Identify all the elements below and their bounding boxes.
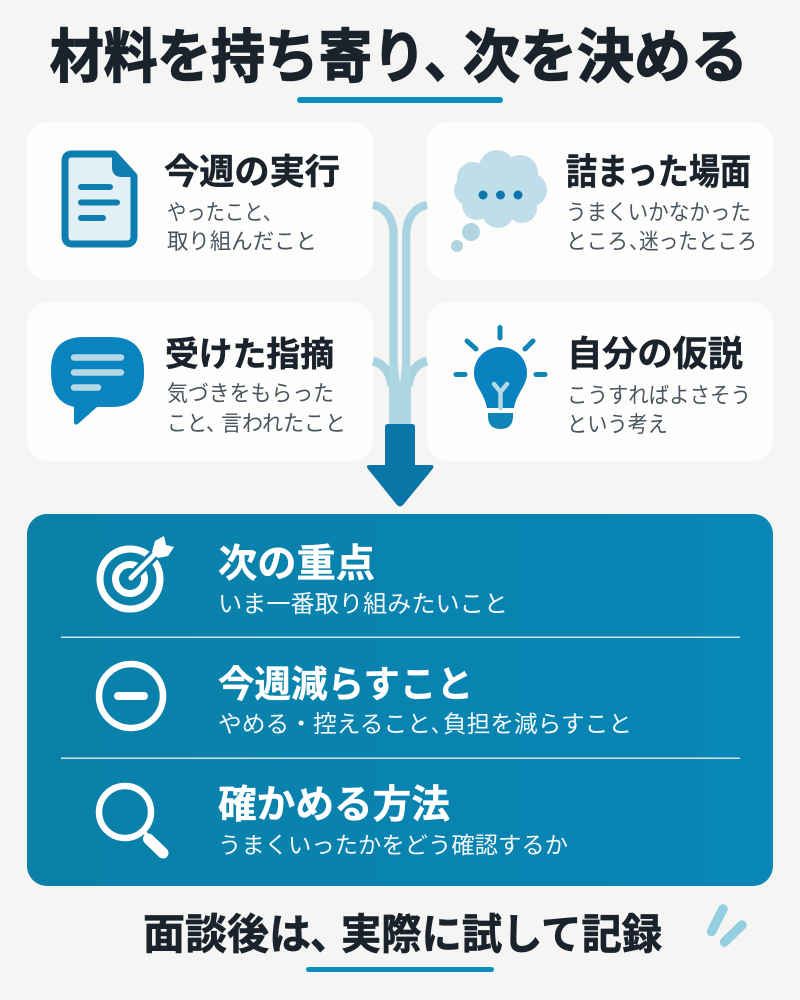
text: こと (167, 411, 207, 436)
text: こうすればよさそう (567, 383, 751, 408)
title: 、 (424, 25, 478, 90)
heading: 今週の実行 (164, 153, 340, 192)
text: やめる・控えること (218, 711, 431, 737)
title: 材料を持ち寄り (50, 25, 426, 90)
title (50, 25, 748, 103)
icon: magnifier (99, 786, 163, 853)
text: いま一番取り組みたいこと (218, 591, 508, 618)
text: 取り組んだこと (167, 229, 317, 254)
text: という考え (567, 412, 668, 437)
heading: 確かめる方法 (218, 784, 450, 827)
heading: 受けた指摘 (165, 336, 334, 374)
text: 迷ったところ (639, 229, 757, 254)
icon: document (65, 153, 136, 244)
text: うまくいかなかった (566, 200, 751, 225)
text: うまくいったかをどう確認するか (218, 832, 568, 858)
text: 負担を減らすこと (443, 711, 632, 737)
arrow (367, 424, 433, 506)
panel: 今週の実行 (27, 122, 373, 280)
panel: 自分の仮説 (427, 302, 773, 461)
text: 言われたこと (221, 411, 346, 436)
heading: 詰まった場面 (566, 151, 751, 192)
text (167, 381, 346, 436)
heading: 今週減らすこと (218, 664, 473, 705)
panel: 受けた指摘 (27, 302, 373, 461)
icon: target (100, 536, 174, 609)
panel: 詰まった場面 (427, 122, 773, 280)
text (567, 383, 751, 437)
icon: light bulb (456, 328, 545, 429)
text (566, 200, 757, 254)
footer heading: 面談後は (143, 911, 311, 958)
icon: accent marks (712, 909, 742, 942)
text: 、 (629, 229, 649, 254)
text: 気づきをもらった (167, 381, 334, 406)
divider (61, 636, 740, 638)
icon: thought cloud (451, 150, 547, 252)
divider (61, 758, 740, 759)
connector lines (373, 205, 427, 424)
heading: 次の重点 (218, 543, 375, 586)
text (167, 200, 317, 254)
footer heading: 、 (310, 911, 350, 958)
title: 次を決める (463, 25, 748, 90)
text: ところ (566, 229, 628, 254)
text: 、 (206, 411, 226, 436)
icon: minus circle (99, 664, 163, 728)
text: やったこと、 (167, 200, 282, 225)
text: 、 (431, 711, 451, 737)
heading: 自分の仮説 (567, 335, 743, 374)
icon: speech bubble (51, 337, 144, 425)
footer heading (143, 911, 662, 972)
footer heading: 実際に試して記録 (341, 911, 662, 958)
panel: next actions (27, 514, 773, 886)
